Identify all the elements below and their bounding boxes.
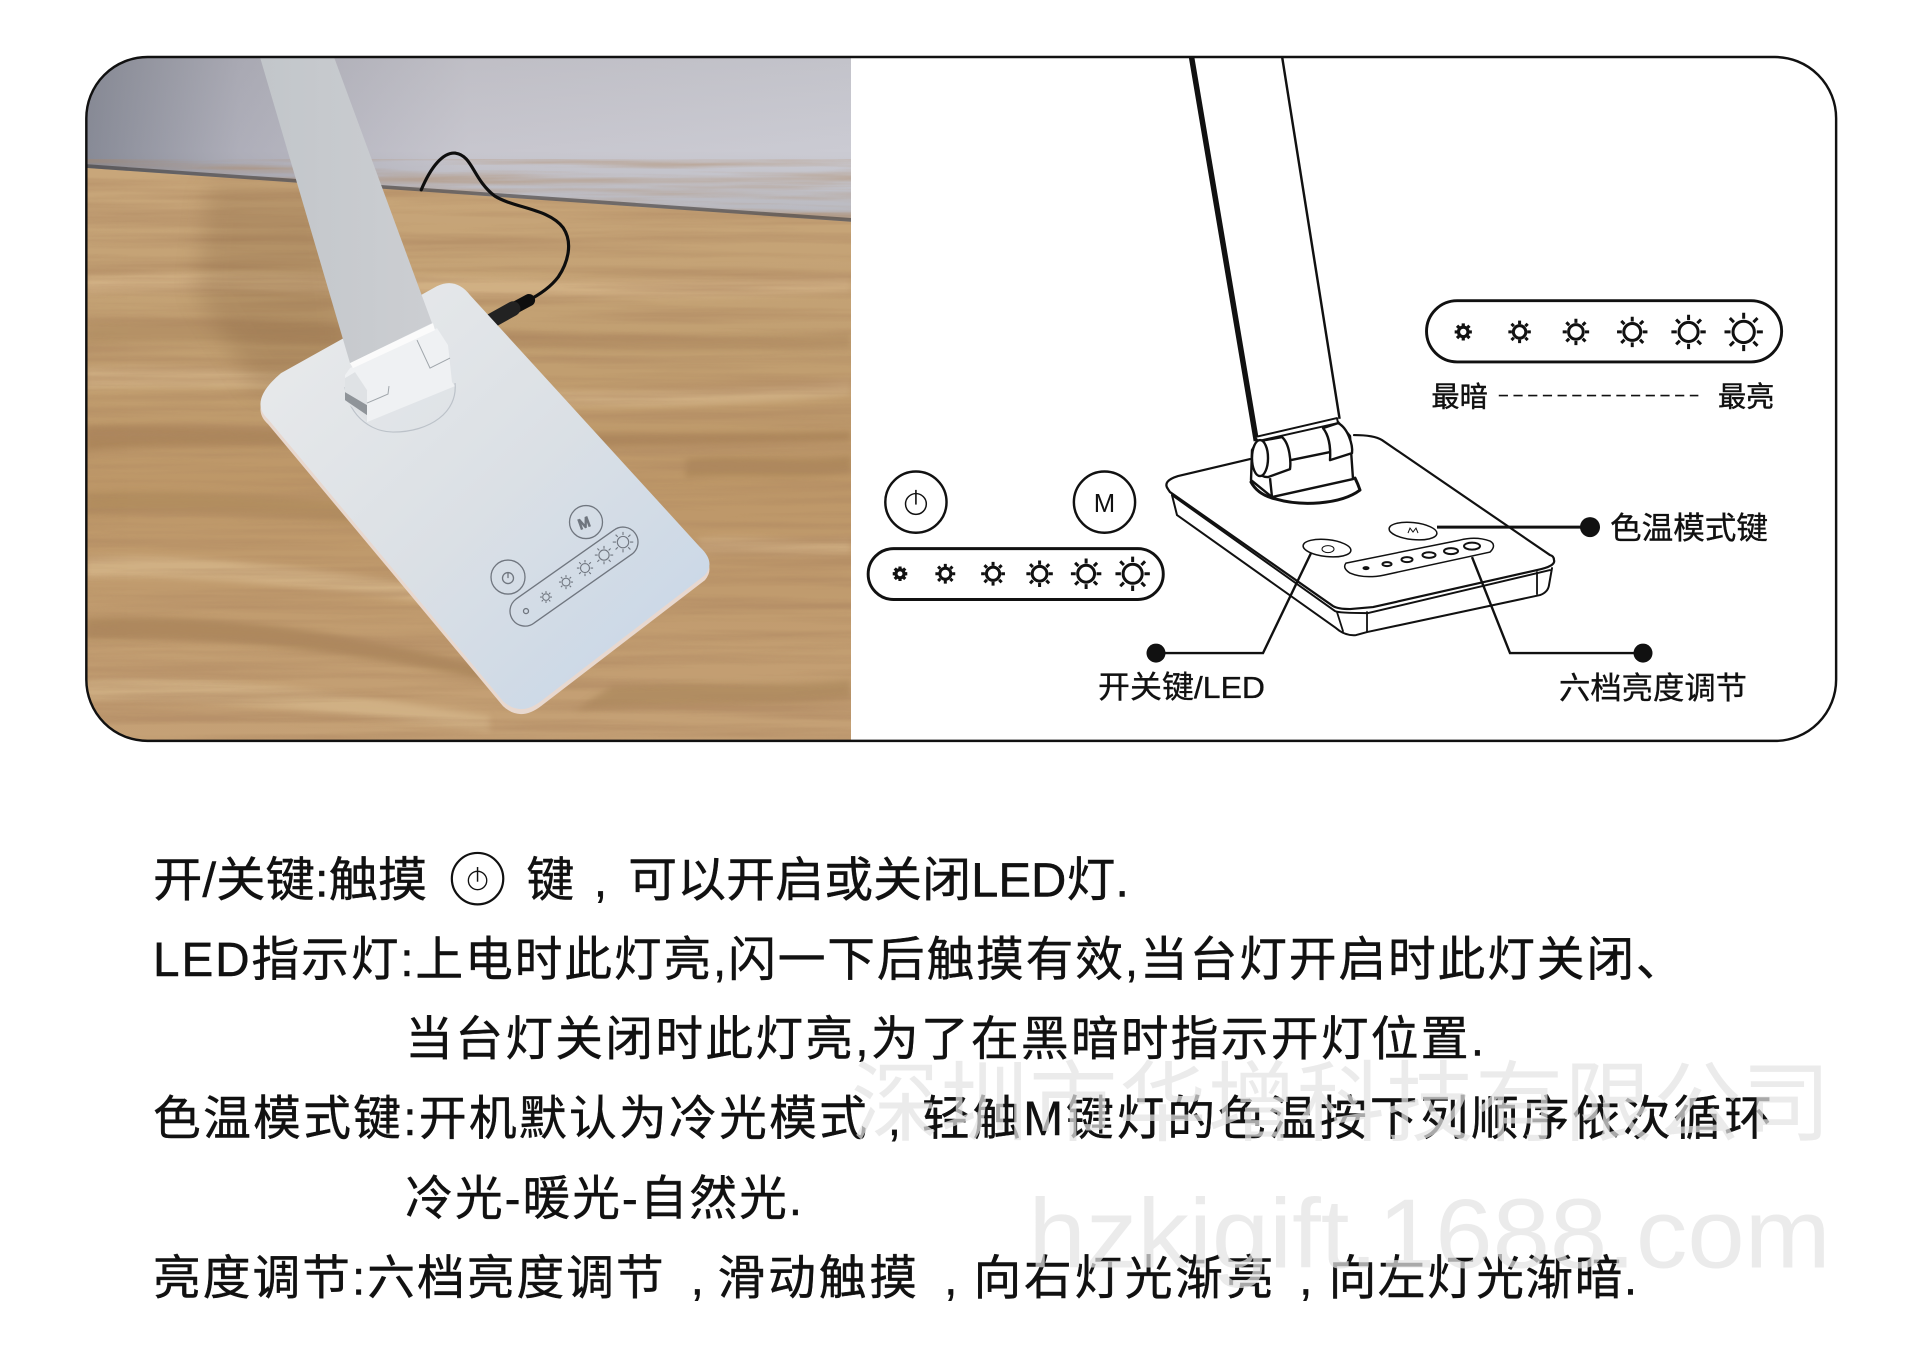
brightness scale labels: 最亮: [1718, 382, 1774, 413]
photo: slider: [510, 527, 638, 626]
photo: M button: [570, 506, 603, 539]
instruction: brightness adjustment: 向右灯光渐亮: [973, 1252, 1273, 1305]
callout: colour temperature key: [1437, 511, 1768, 546]
diagram: M button on base: [1388, 520, 1438, 542]
callout: power key / LED: 开关键/LED: [1098, 670, 1265, 705]
brightness scale labels: [1431, 382, 1774, 413]
photo: lamp hinge: [345, 323, 455, 422]
diagram: lamp hinge: [1251, 418, 1353, 497]
instruction: colour temperature key: 色温模式键:开机默认为冷光模式: [153, 1093, 867, 1146]
watermark: company name: 深圳市华增科技有限公司: [851, 1054, 1831, 1153]
text block: instructions: [153, 853, 1772, 1305]
callout: six-level brightness: [1472, 557, 1747, 706]
photo: lamp base: [260, 283, 709, 714]
icon: M button enlarged: M: [1094, 490, 1115, 518]
brightness scale pill: [1427, 301, 1782, 362]
instruction: brightness adjustment: [153, 1252, 1637, 1305]
instruction: brightness adjustment: ,: [691, 1252, 704, 1305]
instruction: brightness adjustment: 滑动触摸: [718, 1252, 917, 1305]
diagram: lamp base: [1166, 435, 1554, 635]
instruction: colour temperature key: 冷光-暖光-自然光.: [405, 1173, 802, 1226]
photo: power button: [491, 560, 525, 594]
callout: six-level brightness: 六档亮度调节: [1559, 671, 1747, 706]
callout: power key / LED: [1098, 553, 1311, 705]
photo: wall background: [86, 56, 851, 228]
watermark: website: hzkigift.1688.com: [1029, 1178, 1831, 1288]
instruction: LED indicator: [153, 934, 1684, 1067]
callout: colour temperature key: 色温模式键: [1610, 511, 1768, 546]
panel: lamp photo: [86, 56, 851, 741]
icon: M button enlarged: [1074, 472, 1135, 533]
instruction: brightness adjustment: ,: [944, 1252, 957, 1305]
instruction: brightness adjustment: 亮度调节:六档亮度调节: [153, 1252, 664, 1305]
instruction: power key: 开/关键:触摸: [153, 854, 427, 907]
diagram: lamp arm: [1191, 56, 1340, 441]
diagram: power button on base: [1302, 537, 1352, 559]
instruction: power key: [153, 853, 1129, 907]
brightness slider enlarged: [868, 549, 1163, 599]
photo: lamp arm: [260, 57, 432, 363]
instruction: colour temperature key: 轻触M键灯的色温按下列顺序依次循环: [922, 1093, 1772, 1146]
diagram: slider on base: [1345, 538, 1494, 577]
instruction: brightness adjustment: 向左灯光渐暗.: [1329, 1252, 1637, 1305]
instruction: colour temperature key: ,: [888, 1093, 901, 1146]
panel: lamp line diagram: [868, 56, 1782, 706]
brightness scale labels: 最暗: [1431, 382, 1488, 413]
photo: wooden desk: [86, 159, 851, 741]
photo: power cable: [421, 153, 569, 321]
instruction: colour temperature key: [153, 1093, 1772, 1226]
instruction: power key: ,: [594, 854, 607, 907]
icon: power button enlarged: [885, 472, 947, 533]
instruction: power key: 可以开启或关闭LED灯.: [628, 854, 1129, 907]
instruction: LED indicator: 当台灯关闭时此灯亮,为了在黑暗时指示开灯位置.: [405, 1014, 1484, 1067]
photo: touch controls: [491, 506, 638, 626]
photo: base recess: [345, 383, 455, 432]
instruction: power key: 键: [527, 854, 574, 907]
instruction: LED indicator: LED指示灯:上电时此灯亮,闪一下后触摸有效,当台灯开启时此灯关闭、: [153, 934, 1684, 987]
panel frame: [86, 57, 1836, 741]
photo: M button: M: [576, 513, 592, 532]
icon: inline power button: [452, 853, 503, 904]
instruction: brightness adjustment: ,: [1299, 1252, 1312, 1305]
